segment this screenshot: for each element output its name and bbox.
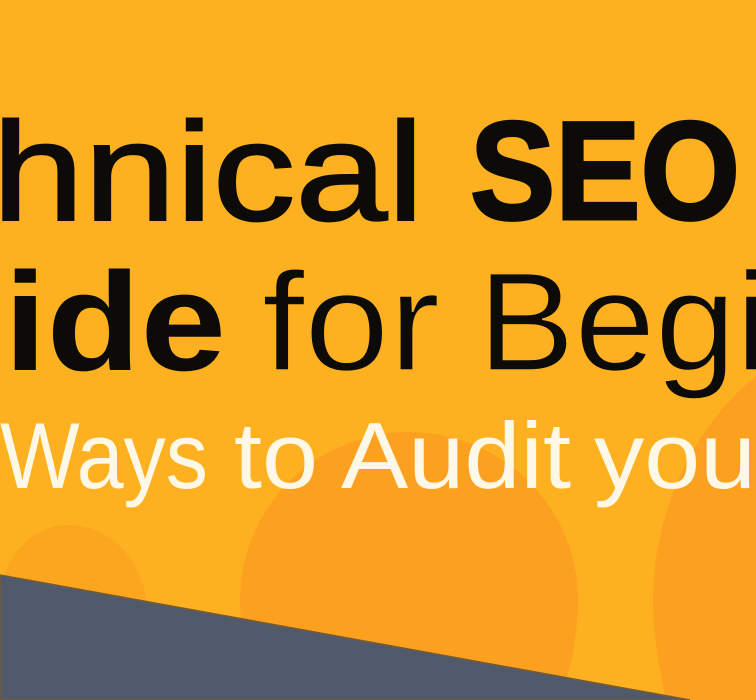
title word: ide: ide xyxy=(4,243,226,400)
decorative circle: left xyxy=(0,525,148,640)
subtitle word: Audit: Audit xyxy=(341,403,571,508)
title word: for: for xyxy=(262,243,440,400)
title word: Begi: Begi xyxy=(478,243,756,400)
subtitle word: to: to xyxy=(234,403,318,508)
title line 2 xyxy=(4,243,756,400)
decorative circle: right xyxy=(653,376,756,700)
dark diagonal panel xyxy=(0,575,690,700)
title word: hnical: hnical xyxy=(0,93,424,250)
subtitle xyxy=(0,403,756,508)
decorative circle: center xyxy=(240,432,578,680)
subtitle word: Ways: Ways xyxy=(0,403,208,508)
subtitle word: you: you xyxy=(594,403,756,508)
title line 1 xyxy=(0,92,740,250)
